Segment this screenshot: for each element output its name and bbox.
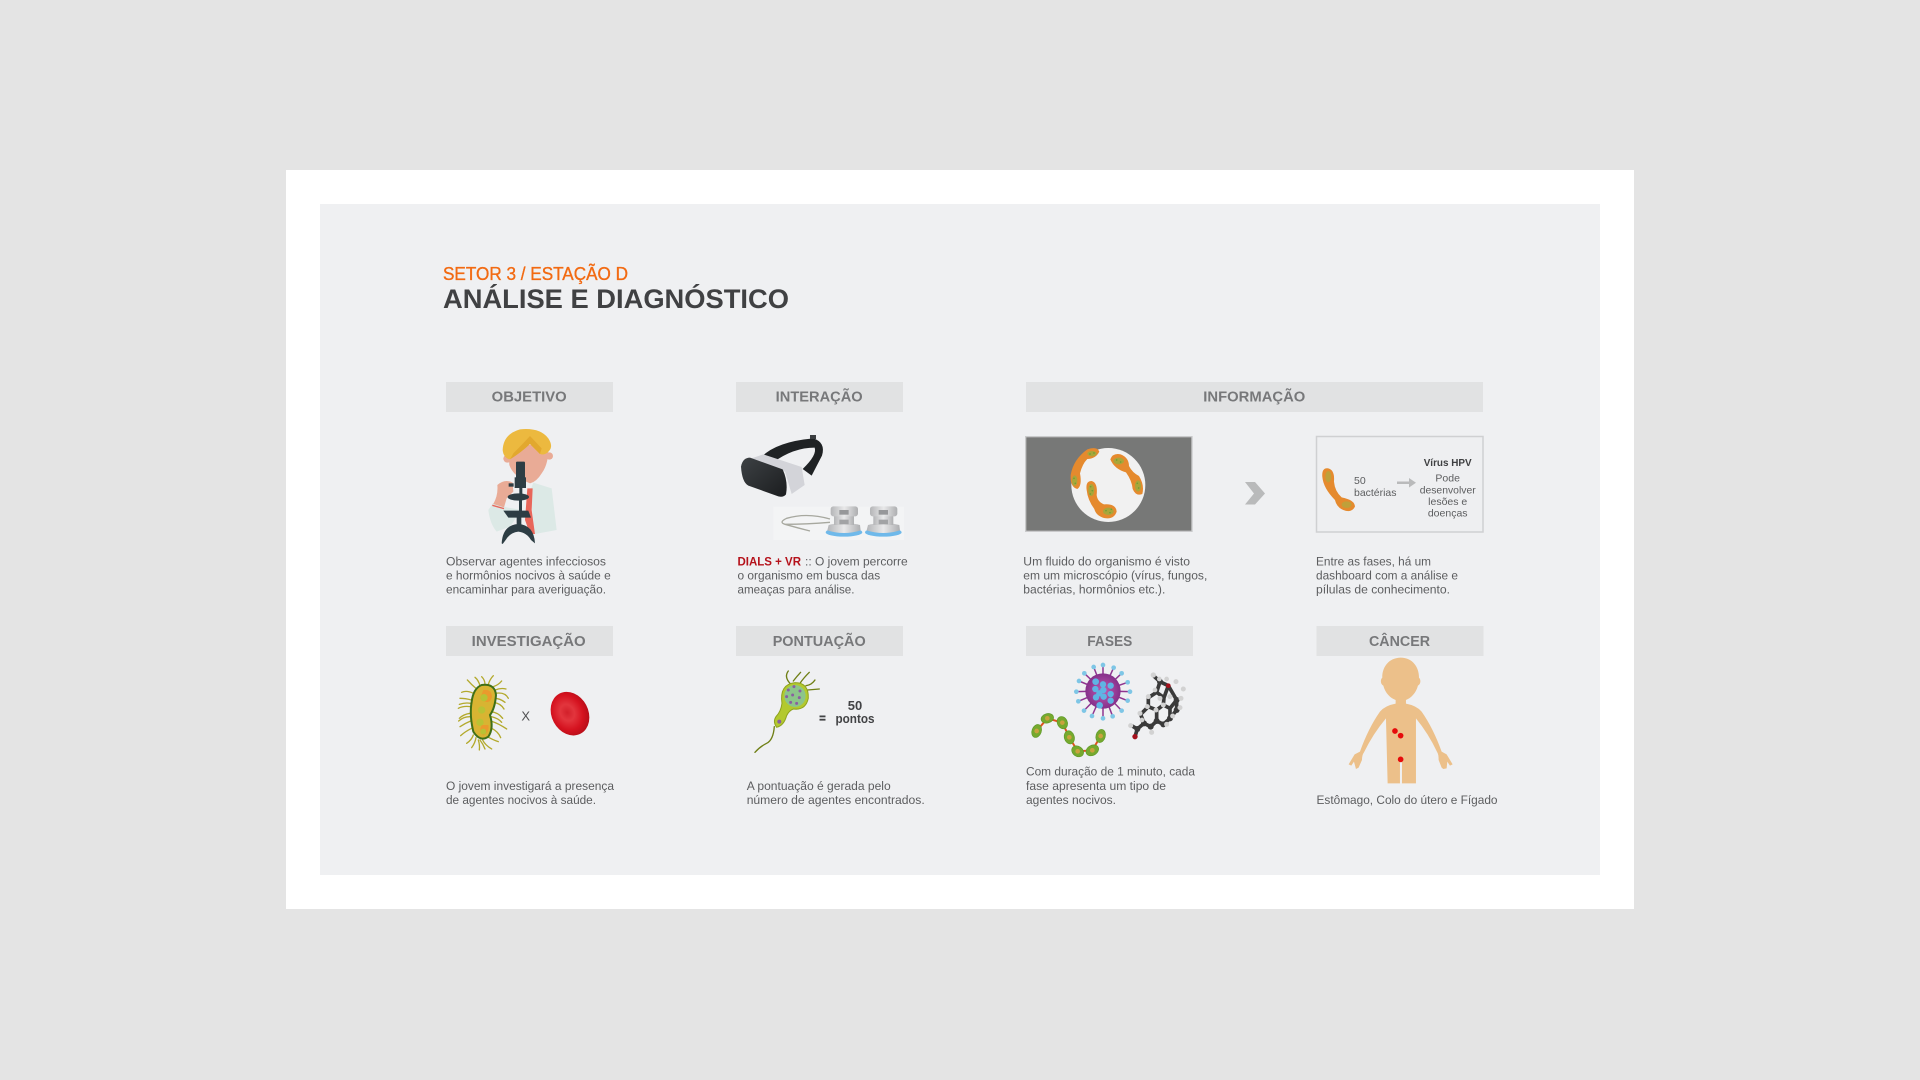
panel: interação [736,382,908,596]
panel: fases [1026,626,1195,807]
description: pontuação: A pontuação é gerada pelo [747,779,891,793]
description: microscope: em um microscópio (vírus, fungos, [1023,568,1207,582]
description: microscope: Um fluido do organismo é visto [1023,554,1190,568]
title block [443,263,789,314]
panel: investigação [446,626,614,807]
description: pontuação [747,779,925,807]
label: vírus HPV: lesões e [1428,496,1467,508]
icon: virus [1074,663,1132,721]
icon: scientist with microscope [488,429,557,544]
description: objetivo: e hormônios nocivos à saúde e [446,568,611,582]
arrow: result [1397,478,1416,488]
label: 50 pontos [820,698,874,726]
description: fases: Com duração de 1 minuto, cada [1026,765,1195,779]
heading: câncer: CÂNCER [1369,632,1431,650]
description: objetivo: Observar agentes infecciosos [446,554,606,568]
description: microscope [1023,554,1207,596]
icon: red blood cell [543,685,597,742]
icon: VR headset and dials [741,435,904,540]
description: dashboard [1316,554,1458,596]
label: vírus HPV: Vírus HPV [1424,457,1472,469]
icon: flagellate microbe [755,671,819,752]
description: interação: :: O jovem percorre [805,554,908,568]
main title: ANÁLISE E DIAGNÓSTICO [443,283,789,314]
description: fases: agentes nocivos. [1026,793,1116,807]
label: vírus HPV: desenvolver [1420,484,1476,496]
label: vírus HPV [1420,457,1476,520]
heading: fases: FASES [1087,634,1133,650]
description: objetivo: encaminhar para averiguação. [446,582,606,596]
description: investigação: O jovem investigará a presença [446,779,614,793]
description: interação: o organismo em busca das [738,568,880,582]
heading: investigação: INVESTIGAÇÃO [472,632,586,650]
microscope view with bacteria [1026,437,1192,531]
description: pontuação: número de agentes encontrados. [747,793,925,807]
icon: bacteria chain [1030,712,1107,759]
dashboard card [1316,436,1483,532]
panel: câncer [1316,626,1498,807]
heading: fases [1026,626,1193,656]
description: interação [738,554,908,596]
description: microscope: bactérias, hormônios etc.). [1023,582,1165,596]
body silhouette [1349,658,1453,783]
description: dashboard: pílulas de conhecimento. [1316,582,1450,596]
description: objetivo [446,554,611,596]
description: fases: fase apresenta um tipo de [1026,779,1166,793]
heading: investigação [446,626,613,656]
description: dashboard: dashboard com a análise e [1316,568,1458,582]
description: interação: DIALS + VR [738,554,801,568]
inner panel [320,204,1600,875]
heading: interação [736,382,903,412]
panel: objetivo [446,382,613,596]
tumour markers [1392,728,1403,762]
heading: câncer [1316,626,1484,656]
panel: informação [1023,382,1483,596]
heading: pontuação: PONTUAÇÃO [773,632,866,650]
arrow: chevron [1245,482,1265,504]
heading: objetivo: OBJETIVO [492,390,567,406]
label: vírus HPV: doenças [1428,508,1468,520]
icon: hormone molecule [1128,672,1186,739]
sector label: SETOR 3 / ESTAÇÃO D [443,263,628,284]
heading: objetivo [446,382,613,412]
description: investigação: de agentes nocivos à saúde. [446,793,596,807]
description: dashboard: Entre as fases, há um [1316,554,1431,568]
description: interação: ameaças para análise. [738,582,854,596]
label: 50 pontos: pontos [836,711,874,726]
label: 50 bactérias: bactérias [1354,487,1396,499]
icon: bacterium [1322,468,1355,511]
panel: pontuação [736,626,925,807]
label: 50 pontos: 50 [848,698,862,713]
icon: hairy bacterium [458,676,508,750]
white frame [286,170,1634,909]
icon: human body with tumour sites [1349,658,1453,783]
label: 50 bactérias: 50 [1354,475,1366,487]
label: 50 bactérias [1354,475,1396,499]
label: vírus HPV: Pode [1435,473,1460,485]
description: fases [1026,765,1195,807]
heading: pontuação [736,626,903,656]
description: investigação [446,779,614,807]
description: câncer: Estômago, Colo do útero e Fígado [1316,793,1498,807]
heading: interação: INTERAÇÃO [776,388,863,406]
heading: informação: INFORMAÇÃO [1203,388,1305,406]
heading: informação [1026,382,1483,412]
label: versus: X [521,708,530,724]
